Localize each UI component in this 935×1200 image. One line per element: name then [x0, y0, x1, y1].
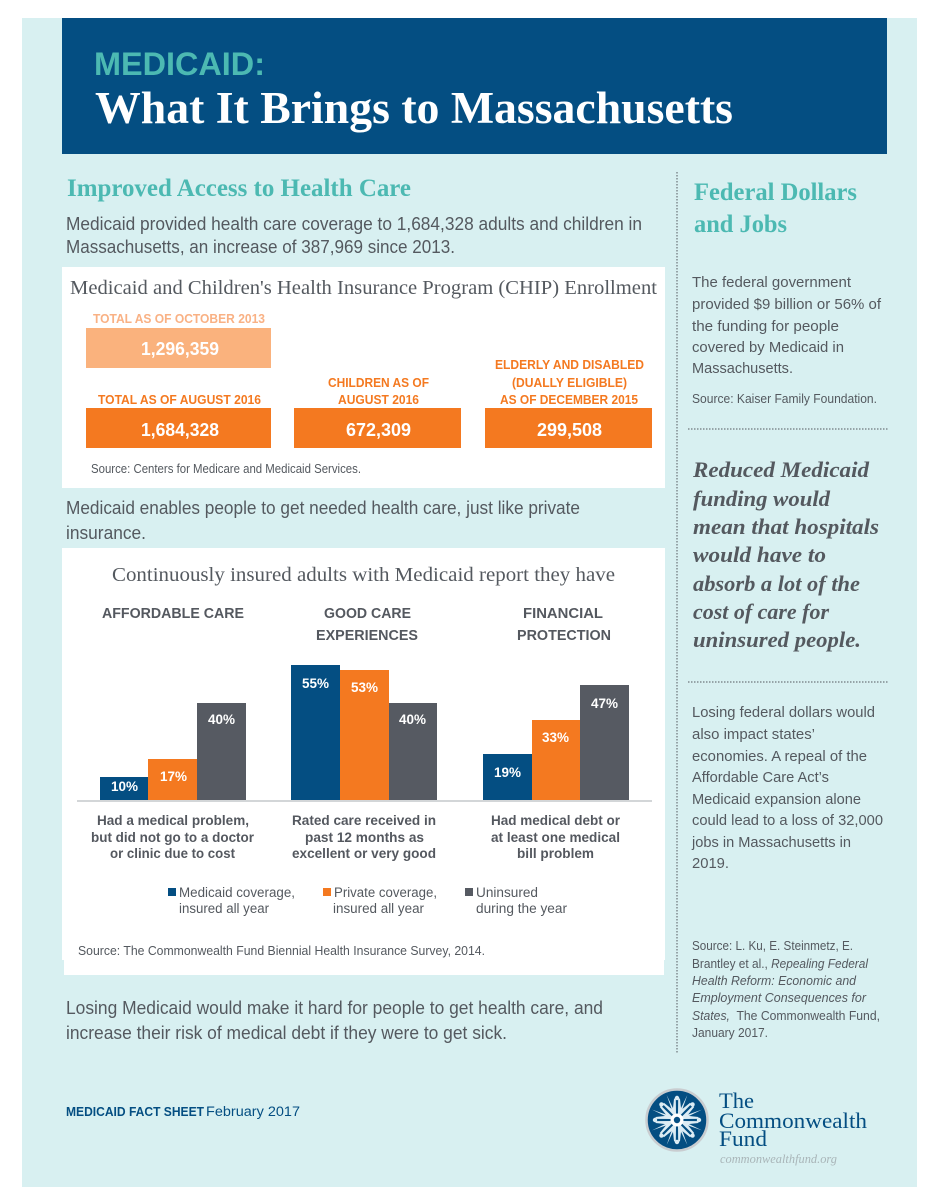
bar group: good care experiences: 53% [351, 680, 378, 695]
bar group: affordable care: AFFORDABLE CARE [102, 606, 244, 622]
bar group: affordable care: 10% [111, 779, 138, 794]
bar group: good care experiences: 55% [302, 676, 329, 691]
stat: elderly and disabled: 299,508 [537, 420, 602, 440]
bar group: good care experiences: past 12 months as [305, 830, 424, 845]
bar group: affordable care: 40% [208, 712, 235, 727]
logo: The Commonwealth Fund [646, 1088, 867, 1166]
bar group: financial protection: 33% [542, 730, 569, 745]
logo wordmark: Fund [719, 1126, 767, 1151]
footer label: MEDICAID FACT SHEET [66, 1105, 204, 1119]
legend: insured all year [179, 901, 269, 916]
bar group: financial protection: at least one medical [491, 830, 620, 845]
stat: total August 2016: TOTAL AS OF AUGUST 2016 [98, 393, 261, 407]
source: Ku et al.: States, The Commonwealth Fund, [692, 1009, 880, 1023]
text block: job losses: Affordable Care Act’s [692, 770, 829, 786]
bar group: financial protection [483, 606, 629, 861]
footer label: February 2017 [206, 1104, 300, 1119]
title banner [62, 18, 887, 154]
stat: elderly and disabled: AS OF DECEMBER 2015 [500, 393, 638, 407]
pull quote [692, 457, 879, 652]
text block: job losses: Medicaid expansion alone [692, 792, 861, 808]
text block: losing Medicaid: Losing Medicaid would make it hard for people to get health care, and [66, 998, 603, 1018]
text block: coverage intro: Medicaid provided health care coverage to 1,684,328 adults and children in [66, 214, 642, 234]
bar group: good care experiences: Rated care received in [292, 813, 436, 828]
bar group: affordable care: or clinic due to cost [110, 846, 235, 861]
bar group: affordable care: 17% [160, 769, 187, 784]
bar group: financial protection: Had medical debt or [491, 813, 621, 828]
legend [168, 885, 568, 916]
text block: coverage intro: Massachusetts, an increase of 387,969 since 2013. [66, 237, 455, 257]
text block: job losses: also impact states’ [692, 727, 815, 743]
source: Ku et al.: Source: L. Ku, E. Steinmetz, E. [692, 939, 853, 953]
bar group: affordable care: but did not go to a doctor [91, 830, 255, 845]
legend: insured all year [333, 901, 425, 916]
bar group: financial protection: PROTECTION [517, 628, 611, 644]
stat: elderly and disabled: (DUALLY ELIGIBLE) [512, 376, 627, 390]
footer label [66, 1104, 300, 1119]
text block: losing Medicaid: increase their risk of medical debt if they were to get sick. [66, 1023, 507, 1043]
pull quote: would have to [693, 542, 826, 567]
text block: federal funding: Massachusetts. [692, 361, 793, 377]
title banner: MEDICAID: [94, 46, 265, 82]
source: Ku et al.: Brantley et al., Repealing Federal [692, 957, 869, 971]
text block: federal funding [692, 275, 882, 377]
stat: total October 2013: 1,296,359 [141, 339, 219, 359]
logo wordmark: commonwealthfund.org [720, 1151, 837, 1166]
text block: job losses: 2019. [692, 856, 729, 872]
legend: Private coverage, [334, 885, 437, 900]
text block: job losses: jobs in Massachusetts in [691, 835, 851, 851]
source: Ku et al.: January 2017. [692, 1026, 768, 1040]
pull quote: cost of care for [693, 599, 829, 624]
stat: children: 672,309 [346, 420, 411, 440]
text block: needed care [66, 498, 580, 543]
stat: total August 2016: 1,684,328 [141, 420, 219, 440]
legend: Medicaid coverage, [179, 885, 295, 900]
text block: federal funding: the funding for people [692, 319, 839, 335]
logo wordmark: The [719, 1088, 754, 1113]
stat: elderly and disabled: ELDERLY AND DISABLED [495, 358, 644, 372]
bar group: financial protection: bill problem [517, 846, 594, 861]
stat: elderly and disabled [485, 358, 652, 448]
panel heading: insured adults: Continuously insured adults with Medicaid report they have [112, 564, 615, 586]
heading: federal dollars [694, 179, 857, 238]
bar group: financial protection: FINANCIAL [523, 606, 603, 622]
stat: total August 2016 [86, 393, 271, 448]
source: Ku et al.: Employment Consequences for [692, 991, 867, 1005]
text block: job losses: economies. A repeal of the [692, 749, 867, 765]
icon: star emblem [646, 1090, 708, 1150]
pull quote: uninsured people. [693, 627, 861, 652]
heading: improved access: Improved Access to Health Care [67, 175, 411, 202]
pull quote: mean that hospitals [693, 514, 879, 539]
pull quote: Reduced Medicaid [692, 457, 870, 482]
source: Ku et al. [692, 939, 880, 1040]
stat: children: CHILDREN AS OF [328, 376, 429, 390]
legend: during the year [476, 901, 568, 916]
bar group: financial protection: 47% [591, 696, 618, 711]
stat: total October 2013 [86, 312, 271, 368]
logo wordmark: Commonwealth [719, 1108, 867, 1133]
text block: needed care: insurance. [66, 523, 146, 543]
bar group: good care experiences: 40% [399, 712, 426, 727]
heading: federal dollars: Federal Dollars [694, 179, 857, 206]
pull quote: absorb a lot of the [693, 571, 860, 596]
bar group: good care experiences: EXPERIENCES [316, 628, 418, 644]
pull quote: funding would [693, 486, 831, 511]
bar group: affordable care: Had a medical problem, [97, 813, 249, 828]
stat: total October 2013: TOTAL AS OF OCTOBER 2013 [93, 312, 265, 326]
text block: federal funding: The federal government [692, 275, 851, 291]
text block: coverage intro [66, 214, 642, 257]
text block: needed care: Medicaid enables people to get needed health care, just like private [66, 498, 580, 518]
text block: federal funding: covered by Medicaid in [692, 340, 844, 356]
bar group: good care experiences: GOOD CARE [324, 606, 411, 622]
source: Ku et al.: Health Reform: Economic and [692, 974, 857, 988]
source: biennial survey: Source: The Commonwealth Fund Biennial Health Insurance Survey, 2014. [78, 944, 485, 958]
legend: Uninsured [476, 885, 538, 900]
heading: federal dollars: and Jobs [694, 211, 787, 238]
bar group: financial protection: 19% [494, 765, 521, 780]
panel: insured adults chart [62, 548, 665, 975]
text block: federal funding: provided $9 billion or 56% of [692, 297, 882, 313]
text block: job losses: Losing federal dollars would [692, 705, 875, 721]
text block: job losses [691, 705, 883, 872]
title banner: What It Brings to Massachusetts [95, 83, 733, 133]
bar group: good care experiences [291, 606, 437, 861]
bar group: good care experiences: excellent or very good [292, 846, 436, 861]
stat: children: AUGUST 2016 [338, 393, 419, 407]
panel heading: enrollment: Medicaid and Children's Health Insurance Program (CHIP) Enrollment [70, 277, 657, 299]
logo wordmark [719, 1088, 867, 1166]
source: CMS: Source: Centers for Medicare and Medicaid Services. [91, 462, 361, 476]
text block: losing Medicaid [66, 998, 603, 1043]
text block: job losses: could lead to a loss of 32,000 [692, 813, 883, 829]
source: Kaiser: Source: Kaiser Family Foundation. [692, 392, 877, 406]
bar group: affordable care [91, 606, 255, 861]
stat: children [294, 376, 461, 448]
panel: CHIP enrollment [62, 267, 665, 488]
